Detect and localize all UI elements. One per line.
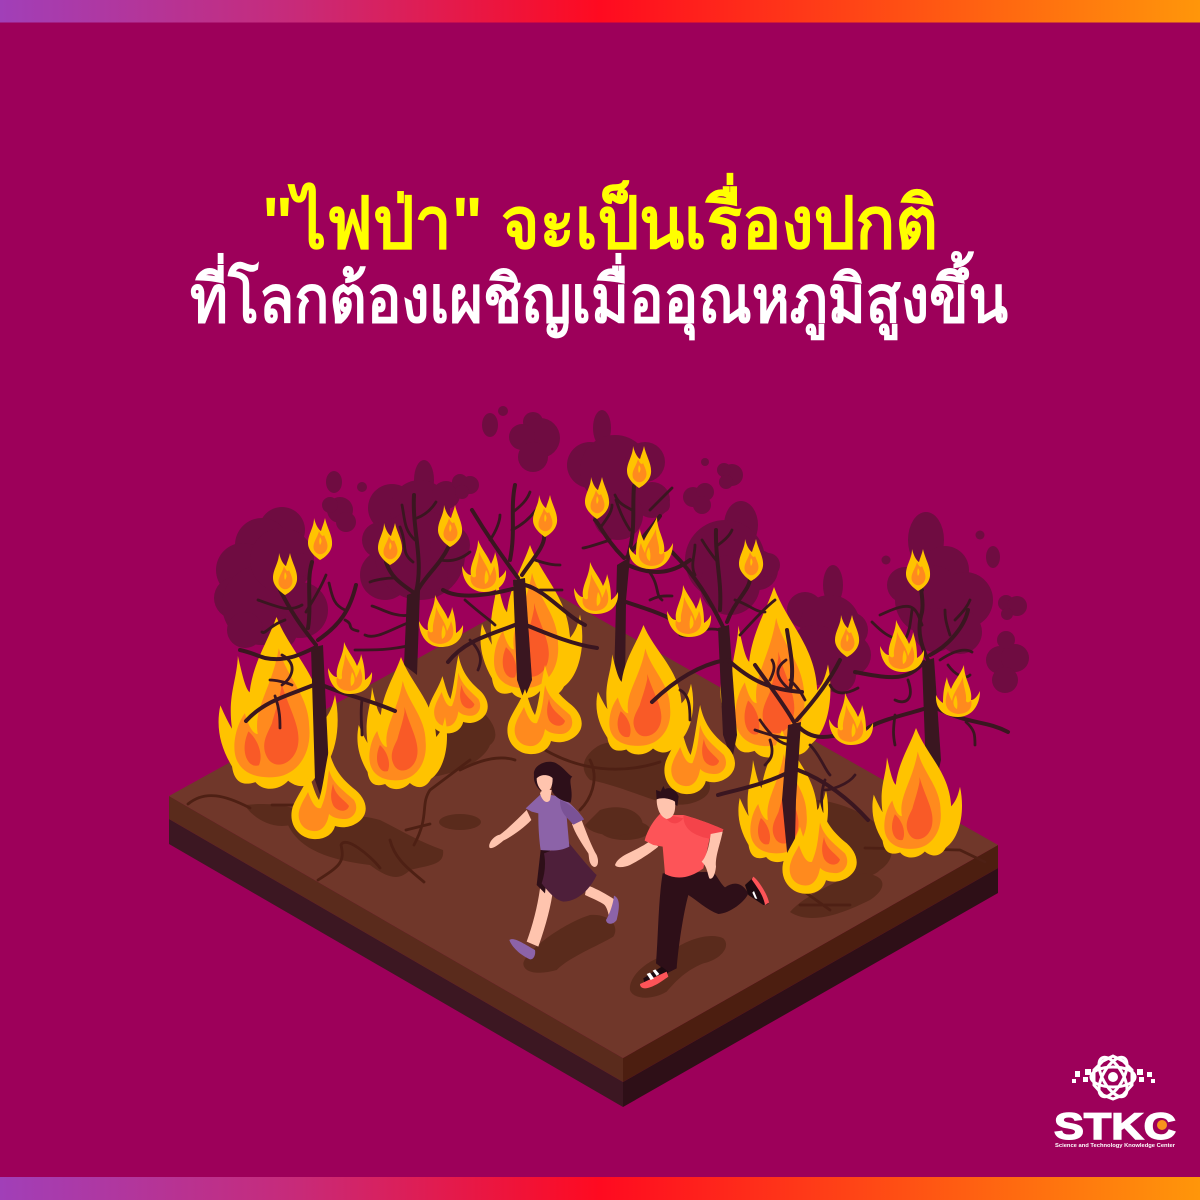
logo pixel dots xyxy=(1072,1069,1155,1083)
tree: first (left) xyxy=(240,562,395,800)
tree: right xyxy=(855,590,1008,790)
forest back row xyxy=(219,446,1008,894)
flame: big second xyxy=(357,657,447,789)
tree: second xyxy=(355,495,470,675)
flame: tall back right xyxy=(721,587,830,757)
tree: fourth (centre) xyxy=(583,486,690,690)
ground platform xyxy=(169,588,998,1107)
smoke: right centre tree xyxy=(685,501,780,615)
title line 2: ที่โลกต้องเผชิญเมื่ออุณหภูมิสูงขึ้น xyxy=(190,250,1008,341)
people running xyxy=(489,762,769,998)
tree: fifth (centre right) xyxy=(652,530,802,760)
smoke: top centre puffs xyxy=(482,406,560,472)
smoke: second tree xyxy=(360,460,479,600)
STKC logo xyxy=(1054,1053,1176,1149)
title xyxy=(190,172,1008,341)
tree: sixth (front right) xyxy=(718,630,868,862)
man running xyxy=(615,786,769,998)
tree: third (centre left) xyxy=(443,485,597,700)
logo wordmark: STKC xyxy=(1054,1106,1176,1147)
flame: lower right xyxy=(738,730,828,862)
smoke: right tree xyxy=(882,512,1029,693)
flame: large left xyxy=(219,617,338,789)
flame: front left double xyxy=(291,750,366,839)
title line 1: "ไฟป่า" จะเป็นเรื่องปกติ xyxy=(262,172,938,264)
flame: back lower left mid xyxy=(428,655,488,733)
top gradient bar xyxy=(0,0,1200,22)
smoke: far right tree top xyxy=(785,565,871,693)
logo dot xyxy=(1157,1120,1167,1130)
smoke: centre tree xyxy=(567,410,743,540)
flame: front right double xyxy=(782,802,857,894)
dark ground patches xyxy=(245,698,892,918)
flame: double right of centre xyxy=(664,705,735,794)
smoke: left xyxy=(214,471,367,649)
logo atom emblem xyxy=(1091,1053,1135,1101)
flame: big centre xyxy=(596,625,693,754)
logo tagline: Science and Technology Knowledge Center xyxy=(1055,1143,1176,1149)
ground top xyxy=(169,588,998,1058)
flame: big right xyxy=(872,728,962,857)
flame: tree top set xyxy=(273,553,297,595)
bottom gradient bar xyxy=(0,1177,1200,1200)
flame: tall back centre xyxy=(480,545,582,698)
woman running xyxy=(489,762,619,973)
ground soil band xyxy=(169,796,623,1082)
flame: centre double xyxy=(507,665,582,754)
smoke clouds xyxy=(214,406,1029,693)
branch and tree-top flames xyxy=(273,446,980,745)
ground bottom layer xyxy=(169,819,623,1107)
ground cracks xyxy=(188,750,985,910)
